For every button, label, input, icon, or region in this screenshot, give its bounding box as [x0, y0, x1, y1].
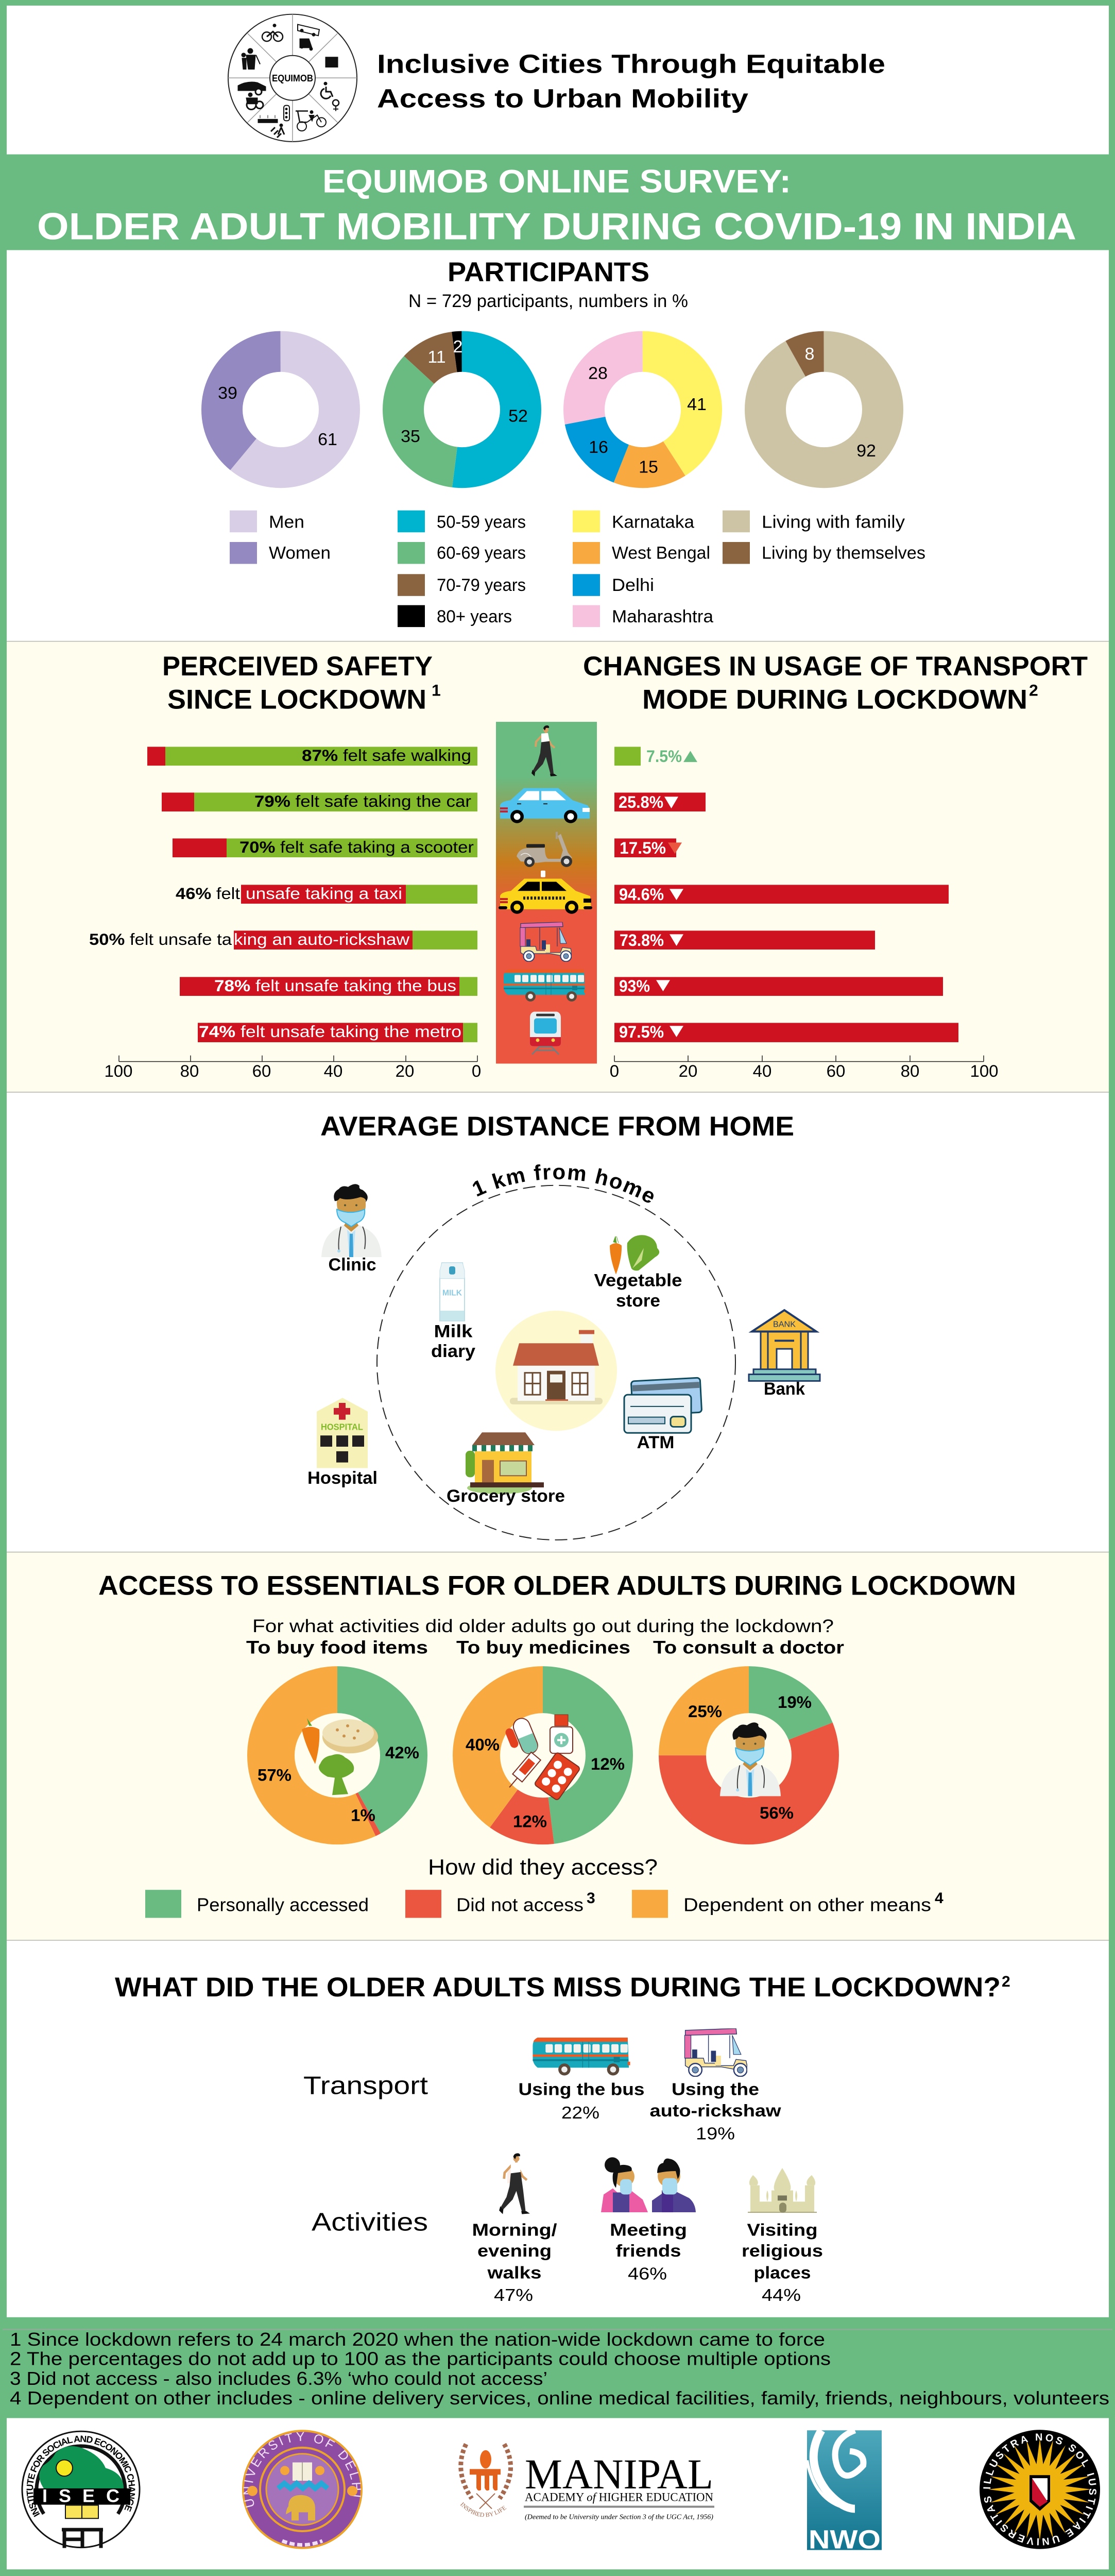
chart: change in mode usage bars: 7.5%	[646, 747, 682, 766]
label: milk diary: diary	[431, 1341, 476, 1361]
logo: University of Delhi	[242, 2430, 363, 2549]
donut: living arrangement: 8	[805, 344, 814, 364]
donut: buy medicines: 40%	[466, 1735, 500, 1754]
question: activities: For what activities did older adults go out during the lockdown?	[252, 1616, 834, 1636]
logo: Manipal: ACADEMY of HIGHER EDUCATION	[525, 2491, 713, 2504]
heading: perceived safety	[162, 651, 441, 715]
legend: access: Dependent on other means	[683, 1894, 931, 1916]
label: clinic: Clinic	[328, 1255, 376, 1275]
logo: Manipal: INSPIRED BY LIFE	[460, 2502, 507, 2517]
legend: participants: Living by themselves	[762, 543, 925, 563]
label: grocery store: Grocery store	[447, 1486, 565, 1506]
icon: doctor	[720, 1722, 781, 1796]
survey title band: EQUIMOB ONLINE SURVEY:	[322, 163, 791, 200]
icon: scooter	[517, 832, 572, 867]
legend: participants: 80+ years	[437, 606, 512, 626]
heading: what did they miss: WHAT DID THE OLDER ADULTS MISS DURING THE LOCKDOWN?	[115, 1972, 1001, 2003]
icon: missed bus	[533, 2038, 630, 2076]
panel: average distance from home	[307, 1111, 821, 1540]
axis: mode usage: 20	[679, 1061, 697, 1080]
heading: perceived safety: SINCE LOCKDOWN	[167, 685, 426, 715]
footnotes	[3, 2329, 1112, 2409]
text: using the bus	[518, 2080, 645, 2123]
footnotes: 2 The percentages do not add up to 100 as the participants could choose multiple options	[10, 2348, 831, 2369]
label: vegetable store: store	[616, 1291, 660, 1311]
label: ATM: ATM	[637, 1432, 674, 1452]
donut: state: 28	[588, 364, 608, 383]
logo: ISEC: INSTITUTE FOR SOCIAL AND ECONOMIC CHANGE	[26, 2436, 135, 2517]
donut: living arrangement	[765, 344, 883, 468]
chart: change in mode usage bars: 73.8%	[620, 930, 664, 950]
axis: perceived safety: 20	[396, 1061, 414, 1080]
panel: access to essentials	[98, 1571, 1016, 1918]
axis: mode usage: 60	[827, 1061, 845, 1080]
donut: buy medicines: 12%	[513, 1812, 547, 1831]
chart: change in mode usage bars: 25.8%	[619, 792, 663, 811]
axis: perceived safety: 100	[104, 1061, 133, 1080]
legend: participants: Women	[269, 543, 331, 563]
header logo: Equimob wheel	[228, 14, 357, 142]
legend: participants: 50-59 years	[437, 512, 526, 532]
icon: metro	[530, 1012, 561, 1055]
donut: living arrangement: 92	[856, 441, 876, 461]
chart: perceived safety bars: 46% felt	[176, 884, 240, 903]
chart: perceived safety bars	[89, 746, 477, 1042]
chart: change in mode usage bars: 94.6%	[619, 885, 664, 904]
header title: Inclusive Cities Through Equitable	[377, 49, 885, 78]
heading: what did they miss: 2	[1002, 1973, 1010, 1990]
text: morning walks	[472, 2221, 557, 2305]
icon: bank: BANK	[773, 1320, 796, 1329]
icon: bank	[749, 1310, 820, 1381]
curved label: 1 km from home: 1 km from home	[473, 1164, 654, 1202]
icon: missed auto-rickshaw	[684, 2028, 747, 2076]
label: bank: Bank	[764, 1379, 805, 1399]
legend: participants: Men	[269, 512, 304, 532]
donut: gender: 39	[218, 383, 237, 403]
legend: participants: West Bengal	[612, 543, 710, 563]
axis: perceived safety: 60	[252, 1061, 271, 1080]
label: vegetable store: Vegetable	[594, 1270, 682, 1290]
icon: pedestrian	[531, 725, 557, 776]
axis: mode usage: 0	[610, 1061, 619, 1080]
icon: milk carton: MILK	[442, 1289, 462, 1297]
donut: buy food items	[258, 1690, 419, 1825]
chart: change in mode usage bars	[614, 747, 958, 1042]
label: vegetable store	[594, 1270, 682, 1311]
text: visiting religious places: Visiting	[747, 2221, 818, 2240]
panel: participants	[218, 257, 925, 627]
text: morning walks: walks	[487, 2263, 541, 2283]
donut: buy food items: 42%	[385, 1743, 419, 1762]
chart: perceived safety bars: 70% felt safe taking a scooter	[239, 838, 474, 856]
icon: walking	[499, 2153, 530, 2214]
donut: consult a doctor	[682, 1690, 815, 1822]
subheadings: activities: To buy food items	[246, 1637, 428, 1657]
donut: buy food items: 1%	[351, 1806, 375, 1825]
chart: perceived safety bars: 79% felt safe taking the car	[254, 792, 471, 810]
chart: perceived safety bars: king an auto-rickshaw	[234, 930, 410, 948]
legend: access: 4	[935, 1890, 944, 1907]
text: morning walks: evening	[477, 2241, 552, 2261]
donut: buy medicines: 12%	[591, 1754, 625, 1773]
header title: Access to Urban Mobility	[377, 83, 748, 113]
heading: participants: PARTICIPANTS	[448, 257, 649, 287]
donut: state: 41	[687, 395, 707, 414]
donut: gender: 61	[318, 430, 337, 449]
logo: Manipal: MANIPAL	[525, 2451, 713, 2498]
text: using the bus: Using the bus	[518, 2080, 645, 2099]
legend: participants: Maharashtra	[612, 606, 714, 626]
text: using the auto-rickshaw: Using the	[672, 2080, 759, 2099]
logo: Manipal	[458, 2443, 714, 2521]
icon: grocery store	[466, 1432, 544, 1494]
icon: ATM cards	[624, 1378, 702, 1433]
legend: participants: 70-79 years	[437, 575, 526, 595]
logo: University of Delhi: UNIVERSITY OF DELHI	[243, 2432, 362, 2508]
legend: participants	[230, 511, 925, 627]
donut: buy food items: 57%	[258, 1766, 291, 1785]
donut: consult a doctor: 19%	[778, 1692, 812, 1711]
icon: hospital	[317, 1398, 368, 1468]
icon: medicines	[502, 1715, 580, 1801]
axis: mode usage: 40	[753, 1061, 771, 1080]
icon: food	[302, 1718, 378, 1795]
label: milk diary: Milk	[434, 1321, 473, 1341]
text: meeting friends: 46%	[628, 2264, 667, 2284]
chart: perceived safety bars: 87% felt safe walking	[302, 746, 471, 765]
legend: participants: Delhi	[612, 575, 654, 595]
chart: change in mode usage bars: 17.5%	[620, 838, 666, 857]
footnotes: 4 Dependent on other includes - online delivery services, online medical facilities, family, friends, neighbours, volunteers	[10, 2387, 1109, 2409]
donut: consult a doctor: 56%	[760, 1803, 794, 1822]
survey title band: OLDER ADULT MOBILITY DURING COVID-19 IN INDIA	[37, 205, 1076, 248]
chart: perceived safety bars: 50% felt unsafe ta	[89, 930, 232, 948]
legend: participants: 60-69 years	[437, 543, 526, 563]
legend: access: 3	[587, 1890, 595, 1907]
axis: perceived safety: 80	[180, 1061, 199, 1080]
legend: access	[145, 1890, 944, 1918]
text: using the auto-rickshaw: auto-rickshaw	[649, 2101, 781, 2121]
legend: access: Did not access	[456, 1894, 584, 1916]
donut: state: 15	[639, 457, 658, 477]
donut: age: 11	[427, 347, 446, 367]
axis: mode usage: 80	[901, 1061, 919, 1080]
panel: what older adults missed	[115, 1972, 1010, 2305]
logo: Manipal: (Deemed to be University under Section 3 of the UGC Act, 1956)	[525, 2513, 713, 2521]
donut: state: 16	[589, 437, 608, 457]
row label: activities: Activities	[312, 2208, 428, 2236]
chart: perceived safety bars: 74% felt unsafe taking the metro	[199, 1022, 461, 1041]
legend: participants: Living with family	[762, 512, 905, 532]
chart: perceived safety bars: 78% felt unsafe taking the bus	[214, 976, 456, 995]
text: using the auto-rickshaw: 19%	[696, 2124, 735, 2144]
axis: perceived safety	[104, 1056, 481, 1080]
text: visiting religious places: religious	[742, 2241, 823, 2261]
subheadings: activities	[246, 1637, 844, 1657]
icon: clinic doctor	[321, 1184, 382, 1257]
legend: access: Personally accessed	[197, 1894, 369, 1916]
label: milk diary	[431, 1321, 476, 1361]
donut: age	[401, 337, 528, 468]
text: using the auto-rickshaw	[649, 2080, 781, 2144]
text: meeting friends	[610, 2221, 687, 2284]
logo: NWO: NWO	[809, 2524, 881, 2554]
text: meeting friends: friends	[615, 2241, 681, 2261]
donut: buy medicines	[466, 1690, 625, 1831]
heading: perceived safety: PERCEIVED SAFETY	[162, 651, 433, 682]
heading: changes in usage: CHANGES IN USAGE OF TRANSPORT	[583, 651, 1088, 682]
logo: ISEC	[22, 2431, 140, 2548]
text: morning walks: 47%	[494, 2285, 533, 2305]
question: how did they access: How did they access?	[428, 1855, 658, 1879]
heading: access to essentials: ACCESS TO ESSENTIALS FOR OLDER ADULTS DURING LOCKDOWN	[98, 1571, 1016, 1601]
header logo: Equimob wheel: EQUIMOB	[272, 73, 313, 84]
text: visiting religious places: places	[754, 2263, 811, 2283]
sample size note: N = 729 participants, numbers in %	[408, 291, 688, 311]
icon: taxi	[499, 871, 592, 914]
chart: change in mode usage bars: 93%	[619, 976, 650, 995]
donut: state	[584, 351, 707, 477]
donut: gender	[218, 351, 339, 468]
donut: age: 2	[453, 337, 462, 357]
icon: vegetables	[610, 1235, 659, 1275]
survey title band	[37, 163, 1076, 248]
donut: age: 35	[401, 427, 420, 446]
text: meeting friends: Meeting	[610, 2221, 687, 2240]
row label: transport: Transport	[303, 2071, 428, 2100]
heading: changes in usage	[583, 651, 1088, 715]
footnotes: 1 Since lockdown refers to 24 march 2020 when the nation-wide lockdown came to force	[10, 2329, 825, 2350]
text: visiting religious places	[742, 2221, 823, 2305]
heading: changes in usage: MODE DURING LOCKDOWN	[642, 685, 1027, 715]
subheadings: activities: To buy medicines	[456, 1637, 630, 1657]
logo: ISEC: ISEC	[42, 2486, 119, 2506]
chart: perceived safety bars: unsafe taking a taxi	[246, 884, 402, 903]
label: hospital: Hospital	[307, 1468, 378, 1488]
footnotes: 3 Did not access - also includes 6.3% ‘who could not access’	[10, 2368, 547, 2389]
donut: consult a doctor: 25%	[688, 1702, 722, 1721]
axis: mode usage: 100	[970, 1061, 999, 1080]
transport icon column	[496, 722, 597, 1063]
donut: age: 52	[508, 406, 528, 426]
panel: safety and usage	[89, 651, 1088, 1080]
icon: milk carton	[440, 1263, 465, 1321]
icon: home	[495, 1311, 617, 1431]
header title	[377, 49, 885, 113]
text: visiting religious places: 44%	[762, 2285, 801, 2305]
icon: friends	[601, 2157, 696, 2212]
text: morning walks: Morning/	[472, 2221, 557, 2240]
axis: mode usage	[610, 1056, 999, 1080]
logo: NWO	[807, 2430, 882, 2554]
chart: change in mode usage bars: 97.5%	[619, 1022, 664, 1041]
text: using the bus: 22%	[561, 2103, 599, 2123]
heading: changes in usage: 2	[1029, 681, 1038, 700]
icon: auto-rickshaw	[520, 922, 572, 961]
heading: perceived safety: 1	[432, 681, 441, 700]
icon: bus	[504, 970, 586, 1002]
subheadings: activities: To consult a doctor	[653, 1637, 844, 1657]
legend: participants: Karnataka	[612, 512, 695, 532]
icon: car	[500, 788, 590, 823]
axis: perceived safety: 0	[472, 1061, 481, 1080]
icon: religious place	[748, 2168, 817, 2213]
axis: perceived safety: 40	[324, 1061, 342, 1080]
dashed 1 km circle	[377, 1185, 735, 1540]
icon: hospital: HOSPITAL	[321, 1421, 363, 1432]
heading: average distance: AVERAGE DISTANCE FROM HOME	[320, 1111, 794, 1142]
logo: Utrecht University: ILLUSTRA NOS SOL IUSTITIAE UNIVERSITAS	[983, 2433, 1096, 2545]
